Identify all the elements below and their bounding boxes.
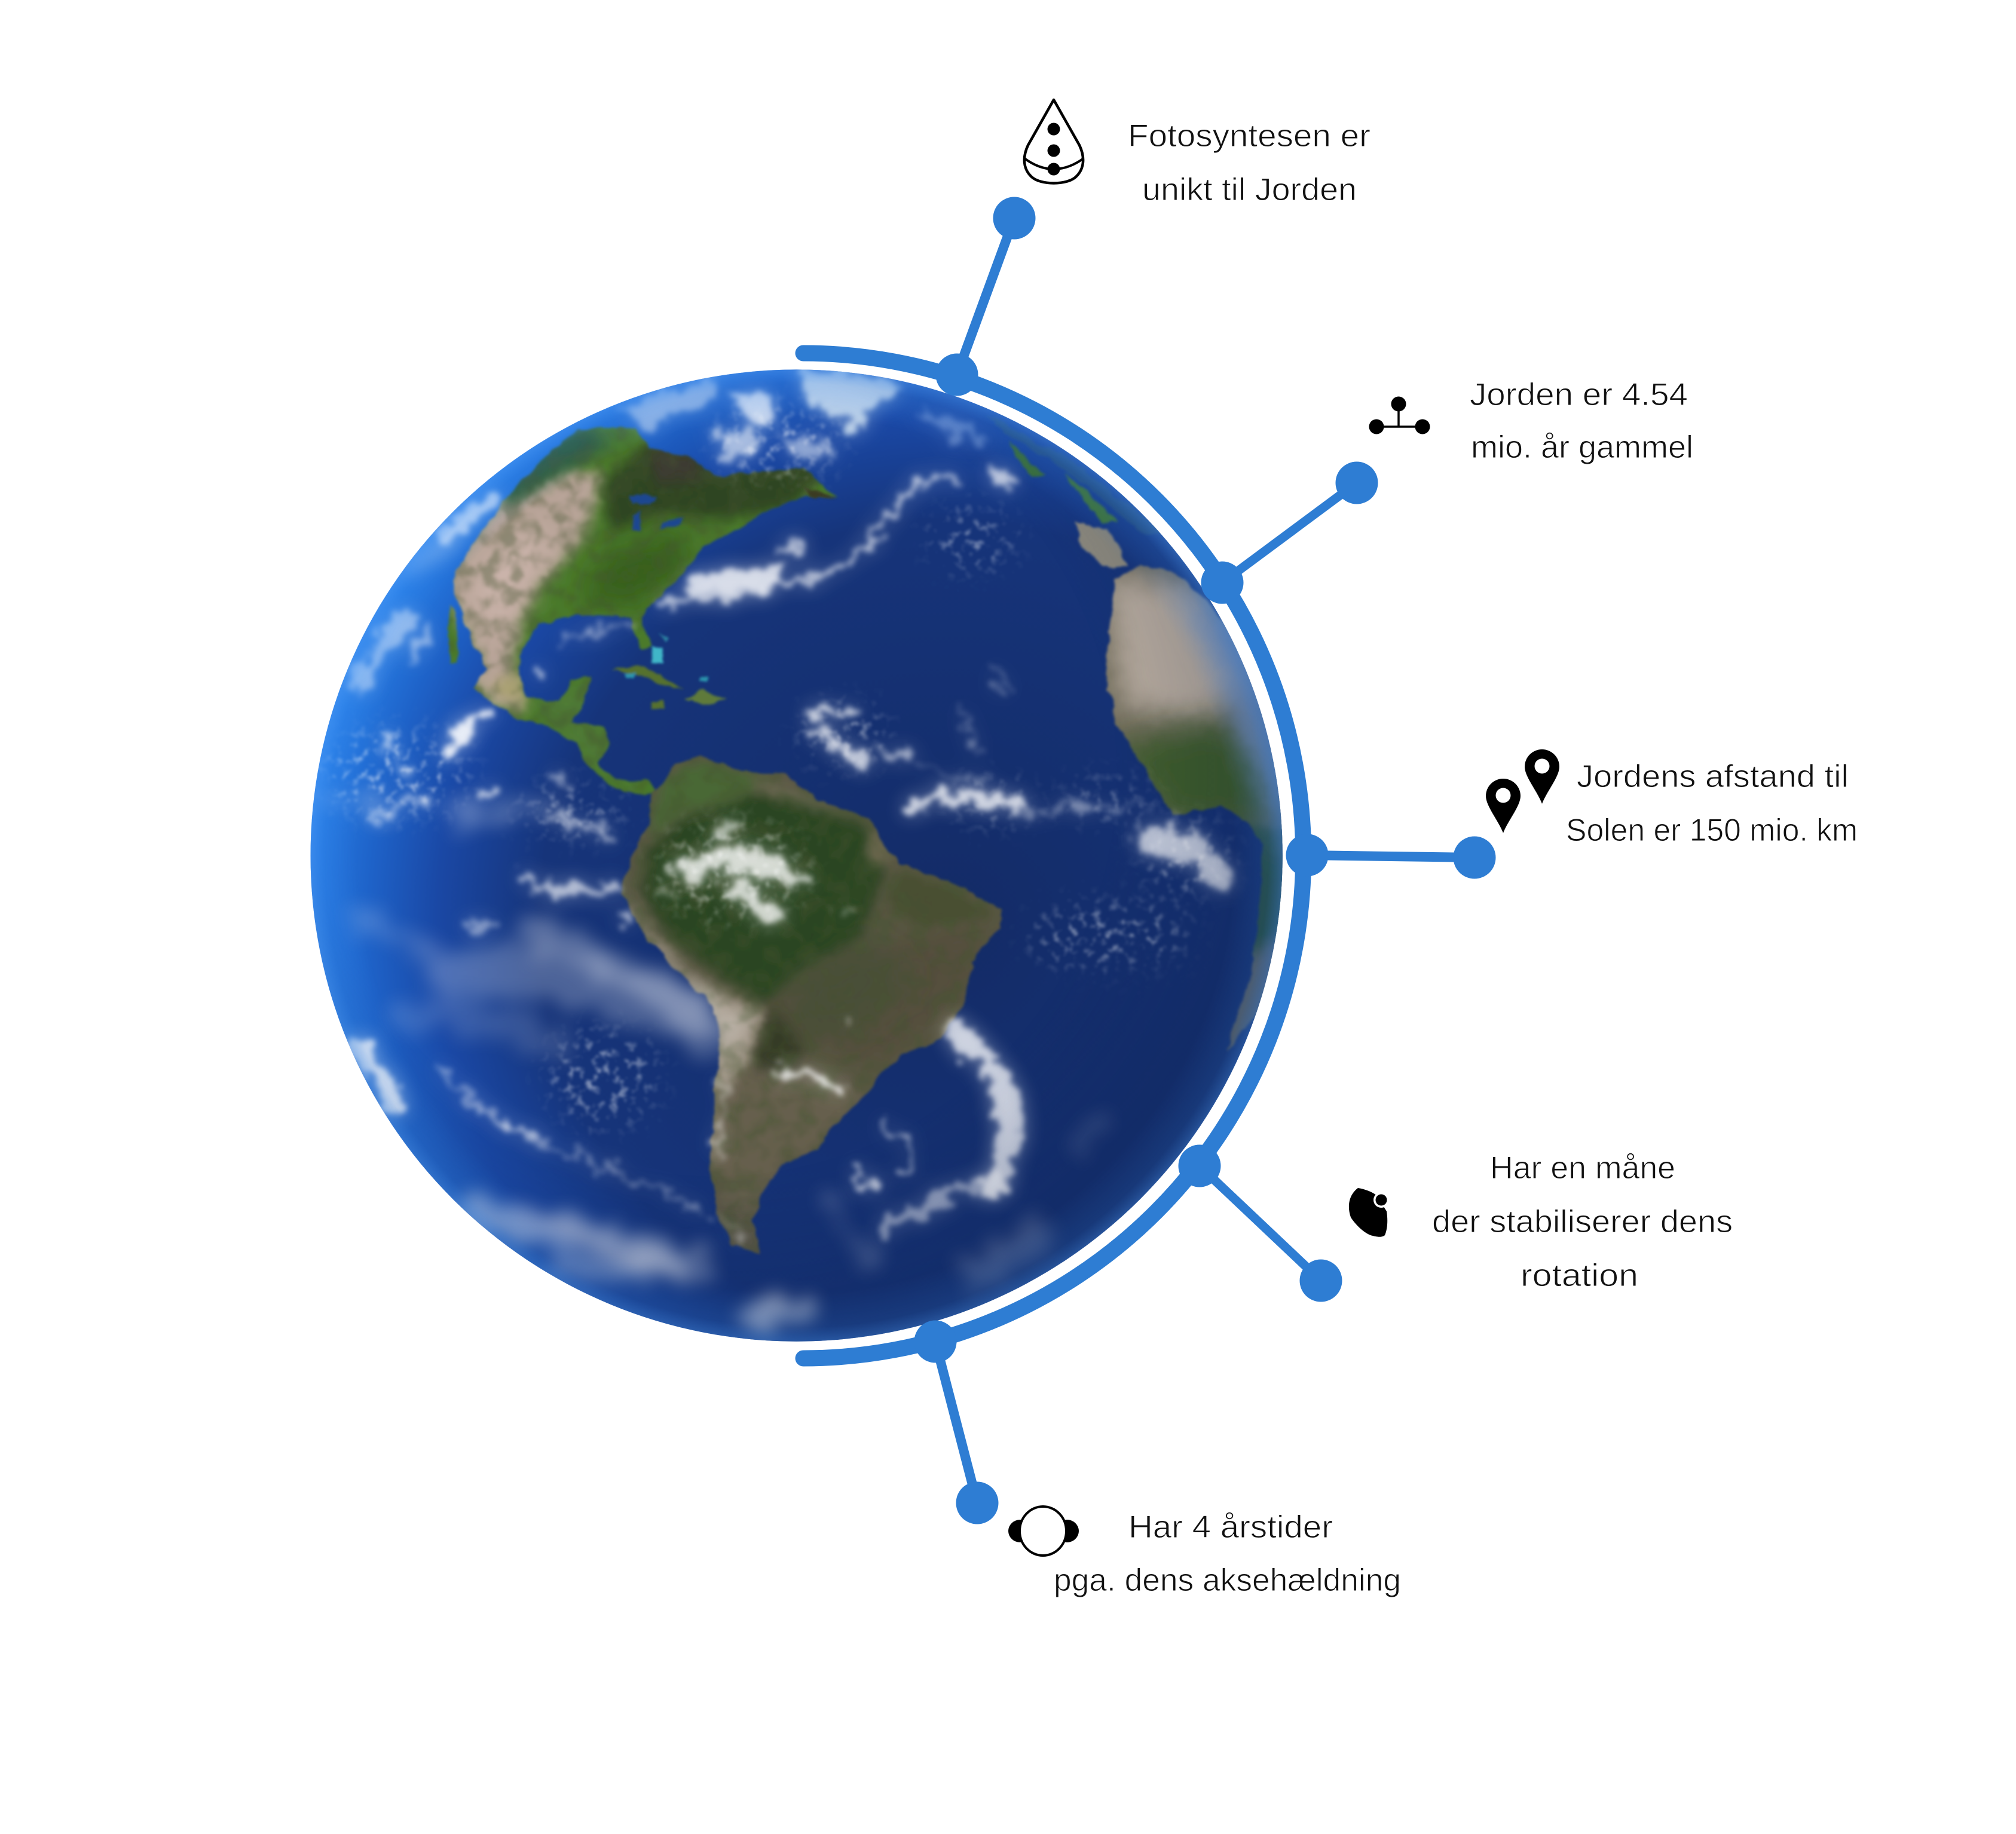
Caribbean islands (611, 633, 727, 708)
continent: South America (610, 748, 1012, 1266)
callout: distance (1286, 749, 1858, 878)
connector line (1201, 461, 1378, 604)
ocean (299, 359, 1297, 1357)
arctic cloud masses (616, 365, 986, 462)
infographic: Earth facts (311, 98, 1855, 1597)
limb atmosphere (310, 369, 1283, 1342)
text: seasons: Har 4 årstider (1128, 1510, 1333, 1545)
text: photosynthesis: unikt til Jorden (1142, 172, 1357, 207)
northern islands and Greenland edge (804, 414, 1167, 567)
Pacific clouds near Central America (377, 676, 629, 926)
text: age: mio. år gammel (1471, 430, 1693, 465)
icon: tilted globe (1008, 1507, 1079, 1556)
orbit arc (803, 353, 1304, 1358)
text: distance (1566, 759, 1858, 848)
text: age: Jorden er 4.54 (1470, 377, 1688, 412)
left limb clouds (357, 504, 490, 1104)
icon: moon (1349, 1188, 1389, 1237)
South Atlantic clouds (853, 1033, 1008, 1230)
text: moon: rotation (1521, 1258, 1638, 1293)
tropical Atlantic clouds (811, 663, 1219, 877)
connector line (1179, 1145, 1342, 1302)
callout: photosynthesis (936, 100, 1370, 396)
connector line (914, 1321, 998, 1524)
mid-Atlantic front (558, 474, 1012, 644)
text: age (1470, 377, 1693, 465)
icon: water drop with dots (1024, 100, 1084, 183)
earth globe (299, 359, 1297, 1357)
clouds (319, 365, 1219, 1318)
text: distance: Solen er 150 mio. km (1566, 813, 1858, 848)
connector line (936, 197, 1035, 396)
callout: age (1201, 377, 1693, 604)
text: moon: der stabiliserer dens (1432, 1204, 1733, 1239)
callout: seasons (914, 1321, 1401, 1598)
South Pacific streaks (438, 1065, 704, 1214)
continent: North America (445, 424, 838, 797)
text: distance: Jordens afstand til (1577, 759, 1849, 794)
speckled cloud fields (325, 411, 1225, 1120)
lower right shading (310, 369, 1283, 1342)
callout: moon (1179, 1145, 1733, 1302)
text: seasons (1054, 1510, 1401, 1598)
text: seasons: pga. dens aksehældning (1054, 1563, 1401, 1598)
text: photosynthesis: Fotosyntesen er (1128, 118, 1370, 154)
text: photosynthesis (1128, 118, 1370, 207)
great lakes (629, 494, 685, 529)
text: moon: Har en måne (1490, 1150, 1675, 1186)
Amazon clouds (659, 825, 856, 1240)
icon: molecule (1369, 397, 1430, 434)
icon: map pins (1486, 749, 1559, 833)
broad veils (319, 540, 1109, 1318)
continent: Africa (1096, 553, 1290, 1071)
connector line (1286, 834, 1495, 878)
text: moon (1432, 1150, 1733, 1293)
